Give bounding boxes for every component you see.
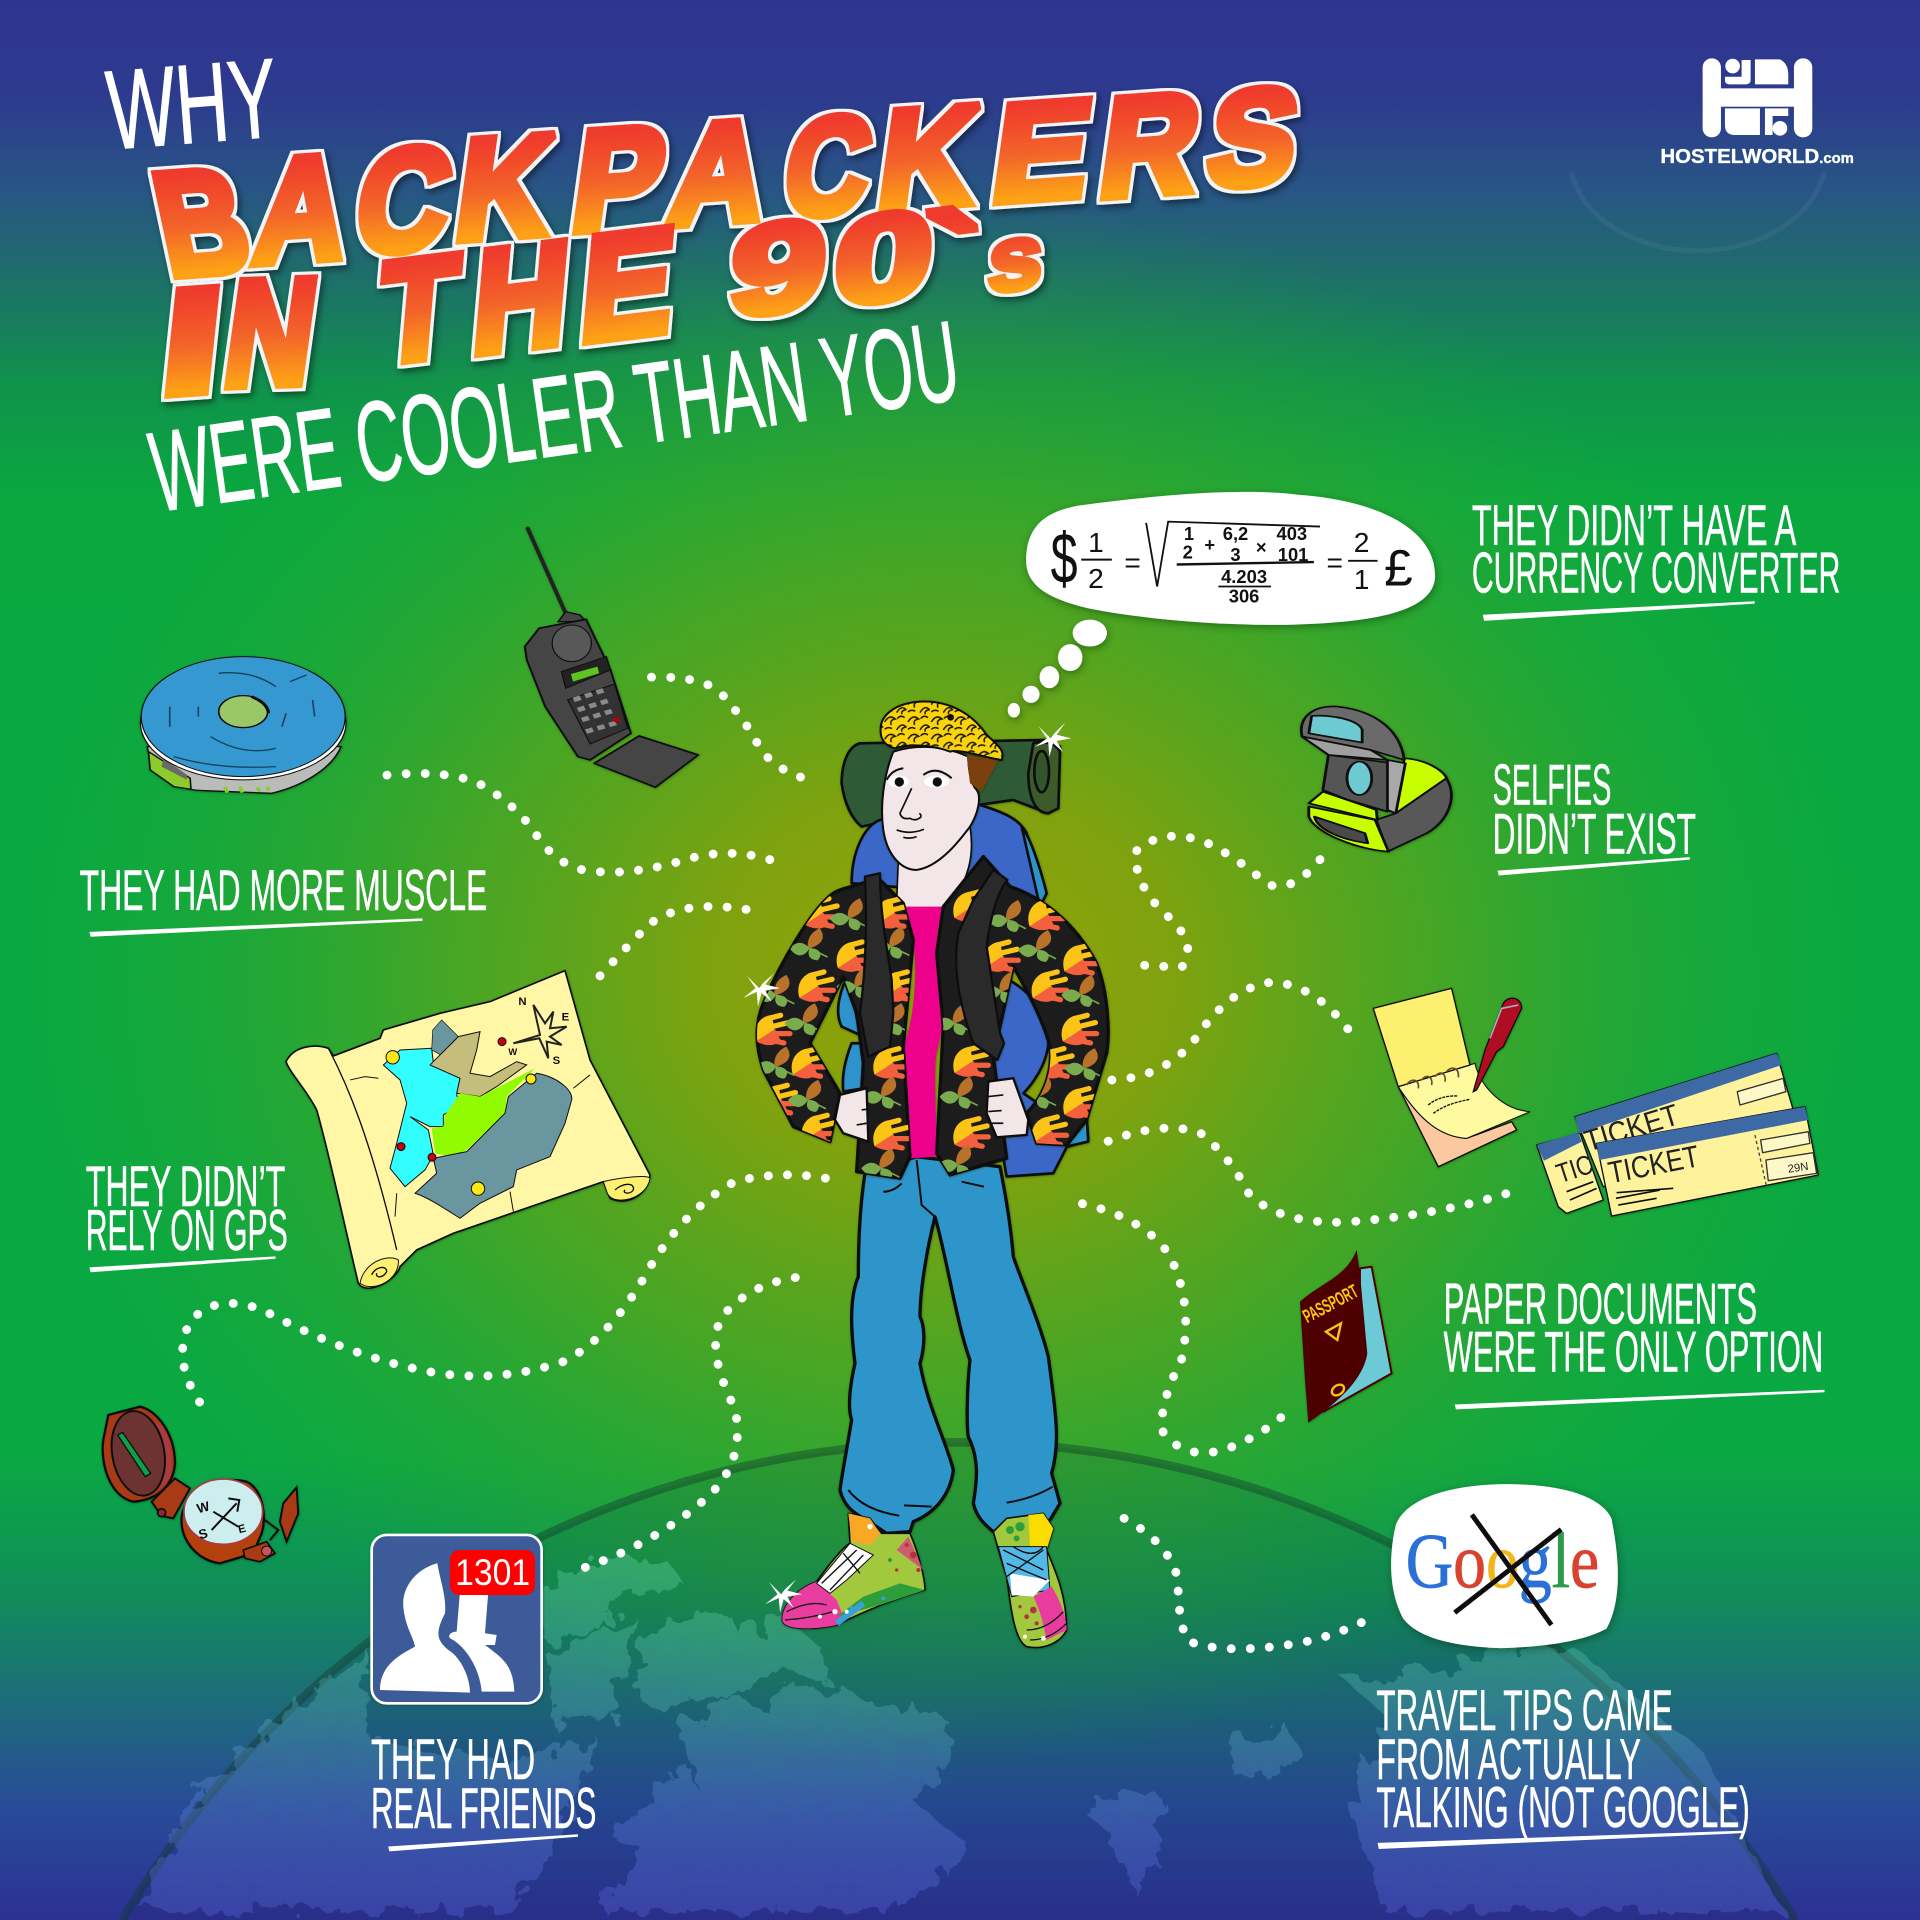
icon: facebook friends: 1301: [455, 1552, 530, 1593]
label: they didn't rely on gps: [86, 1155, 288, 1272]
icon: brick mobile phone: [525, 528, 698, 787]
torso, jacket and head: [755, 701, 1108, 1180]
label: selfies didn't exist: DIDN’T EXIST: [1493, 802, 1696, 866]
label: travel tips: TRAVEL TIPS CAME: [1376, 1679, 1673, 1743]
thought bubble with currency maths: 3: [1230, 544, 1241, 565]
title: backpackers in the 90's: A: [248, 123, 355, 296]
title: backpackers in the 90's: s: [986, 204, 1045, 313]
title: backpackers in the 90's: E: [575, 196, 680, 374]
thought bubble with currency maths: 4.203: [1221, 566, 1267, 587]
rucksack straps: [860, 873, 893, 1057]
left shoe: [782, 1513, 925, 1628]
title: backpackers in the 90's: C: [347, 116, 461, 285]
icon: google card crossed out: Google: [1406, 1517, 1599, 1604]
icon: passport: [1300, 1250, 1392, 1423]
title: backpackers in the 90's: P: [564, 96, 674, 262]
title: backpackers in the 90's: S: [1200, 59, 1307, 217]
label: they had real friends: THEY HAD: [371, 1728, 535, 1792]
icon: compass: W: [195, 1498, 212, 1516]
label: travel tips: [1376, 1679, 1750, 1849]
icon: facebook friends: [372, 1535, 542, 1703]
label: they didn't rely on gps: THEY DIDN’T: [86, 1155, 285, 1219]
thought bubble with currency maths: 306: [1229, 585, 1259, 606]
label: they didn't have a currency converter: [1472, 494, 1840, 621]
title: backpackers in the 90's: A: [660, 89, 777, 257]
thought bubble with currency maths: [1008, 492, 1435, 718]
logo: hostelworld: HOSTELWORLD.com: [1660, 146, 1854, 168]
label: travel tips: FROM ACTUALLY: [1376, 1728, 1641, 1792]
title: backpackers in the 90's: `: [923, 185, 994, 340]
title: backpackers in the 90's: I: [155, 257, 230, 426]
icon: plane tickets: 29N: [1787, 1161, 1809, 1176]
thought bubble with currency maths: 1: [1354, 564, 1369, 595]
bedroll and backpack: [838, 740, 1088, 1177]
logo: hostelworld: [1660, 58, 1854, 168]
icon: plane tickets: TICKET: [1605, 1139, 1702, 1190]
thought bubble with currency maths: +: [1204, 534, 1215, 555]
thought bubble with currency maths: =: [1326, 547, 1343, 578]
icon: compass: [103, 1407, 298, 1563]
title: why: WHY: [102, 34, 282, 173]
title: backpackers in the 90's: C: [776, 86, 880, 247]
title: backpackers in the 90's: R: [1092, 63, 1209, 228]
title: backpackers in the 90's: B: [141, 138, 262, 307]
icon: compass: S: [197, 1525, 209, 1542]
face details: [967, 755, 998, 792]
icon: paper map: N: [518, 996, 527, 1008]
label: paper documents: [1444, 1273, 1824, 1409]
dotted connector lines: [183, 677, 1521, 1649]
icon: paper map: E: [562, 1012, 570, 1024]
icon: plane tickets: [1537, 1053, 1818, 1216]
backpacker figure: [755, 701, 1108, 1648]
icon: notepad and pen: [1373, 988, 1530, 1167]
globe: [122, 1442, 1795, 1920]
icon: plane tickets: TICKET: [1581, 1099, 1683, 1158]
right shoe: [993, 1513, 1067, 1648]
title: were cooler than you: WERE COOLER THAN YOU: [143, 298, 967, 537]
head: [882, 747, 979, 870]
lens flare: [1571, 171, 1824, 251]
thought bubble with currency maths: 1: [1088, 527, 1104, 558]
title: backpackers in the 90's: [141, 59, 1307, 426]
icon: compass: E: [237, 1523, 248, 1536]
label: they had real friends: REAL FRIENDS: [371, 1777, 596, 1841]
thought bubble with currency maths: $: [1051, 520, 1078, 599]
title: backpackers in the 90's: 9: [725, 191, 832, 345]
thought bubble with currency maths: 6,2: [1223, 523, 1248, 544]
sparkles: [743, 722, 1071, 1613]
thought bubble with currency maths: =: [1124, 547, 1141, 578]
curly hair: [881, 701, 1003, 760]
hands: [835, 1088, 868, 1142]
thought bubble with currency maths: 2: [1088, 563, 1104, 594]
icon: paper map: S: [553, 1055, 561, 1067]
icon: discman cd player: [140, 657, 346, 793]
patterned jacket: [757, 877, 913, 1178]
pink t-shirt: [900, 907, 945, 1158]
label: they didn't rely on gps: RELY ON GPS: [86, 1199, 288, 1263]
icon: instant camera: [1301, 706, 1451, 852]
thought bubble with currency maths: 1: [1184, 523, 1194, 544]
icon: google card crossed out: [1391, 1484, 1618, 1648]
title: backpackers in the 90's: E: [984, 70, 1100, 232]
icon: paper map: [286, 971, 650, 1288]
title: backpackers in the 90's: T: [373, 223, 464, 395]
title: backpackers in the 90's: K: [870, 75, 987, 240]
title: backpackers in the 90's: K: [447, 105, 563, 271]
label: selfies didn't exist: SELFIES: [1493, 753, 1611, 817]
label: they had real friends: [371, 1728, 596, 1851]
label: they had more muscle: THEY HAD MORE MUSCLE: [80, 859, 487, 923]
label: selfies didn't exist: [1493, 753, 1696, 876]
neck: [897, 827, 971, 910]
thought bubble with currency maths: 403: [1277, 523, 1307, 544]
icon: plane tickets: TIC: [1552, 1148, 1597, 1189]
label: they had more muscle: [80, 859, 487, 937]
icon: paper map: W: [508, 1047, 517, 1057]
thought bubble with currency maths: £: [1384, 538, 1413, 596]
thought bubble with currency maths: 101: [1278, 544, 1308, 565]
thought bubble with currency maths: 2: [1354, 527, 1369, 558]
thought bubble with currency maths: 2: [1183, 541, 1193, 562]
icon: passport: PASSPORT: [1300, 1281, 1362, 1328]
title: backpackers in the 90's: 0: [829, 183, 938, 333]
thought bubble with currency maths: ×: [1256, 536, 1267, 557]
trousers and shoes: [782, 1157, 1067, 1648]
title: backpackers in the 90's: N: [216, 246, 326, 418]
title: backpackers in the 90's: H: [467, 210, 575, 386]
